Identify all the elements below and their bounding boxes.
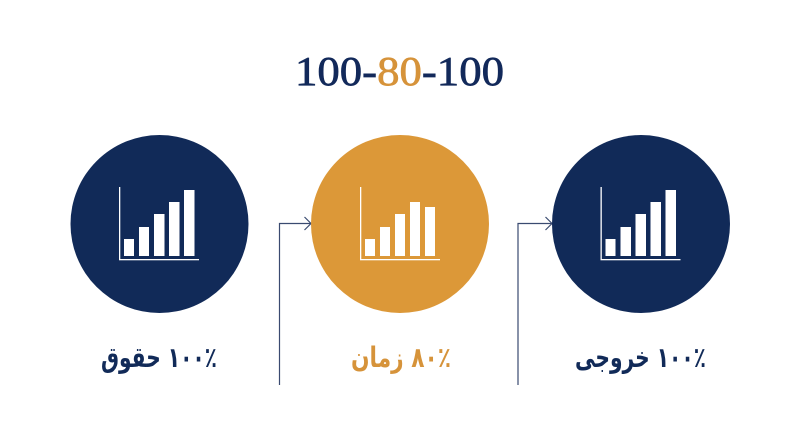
- arrow: time to output: [518, 217, 552, 385]
- icon: bar chart with lower last bar: [360, 187, 440, 260]
- label: 100% rights: ۱۰۰٪ حقوق: [101, 341, 217, 374]
- panel: time: [311, 135, 489, 374]
- panel: rights: [70, 135, 248, 374]
- icon: rising bar chart: [600, 187, 680, 260]
- title: 100-80-100: [295, 48, 504, 94]
- icon: rising bar chart: [119, 187, 199, 260]
- panel: output: [552, 135, 730, 374]
- arrow: rights to time: [280, 217, 311, 385]
- circle: output: [552, 135, 730, 313]
- circle: time: [311, 135, 489, 313]
- label: 100% output: ۱۰۰٪ خروجی: [575, 341, 706, 374]
- label: 80% time: ۸۰٪ زمان: [351, 341, 451, 374]
- circle: rights: [70, 135, 248, 313]
